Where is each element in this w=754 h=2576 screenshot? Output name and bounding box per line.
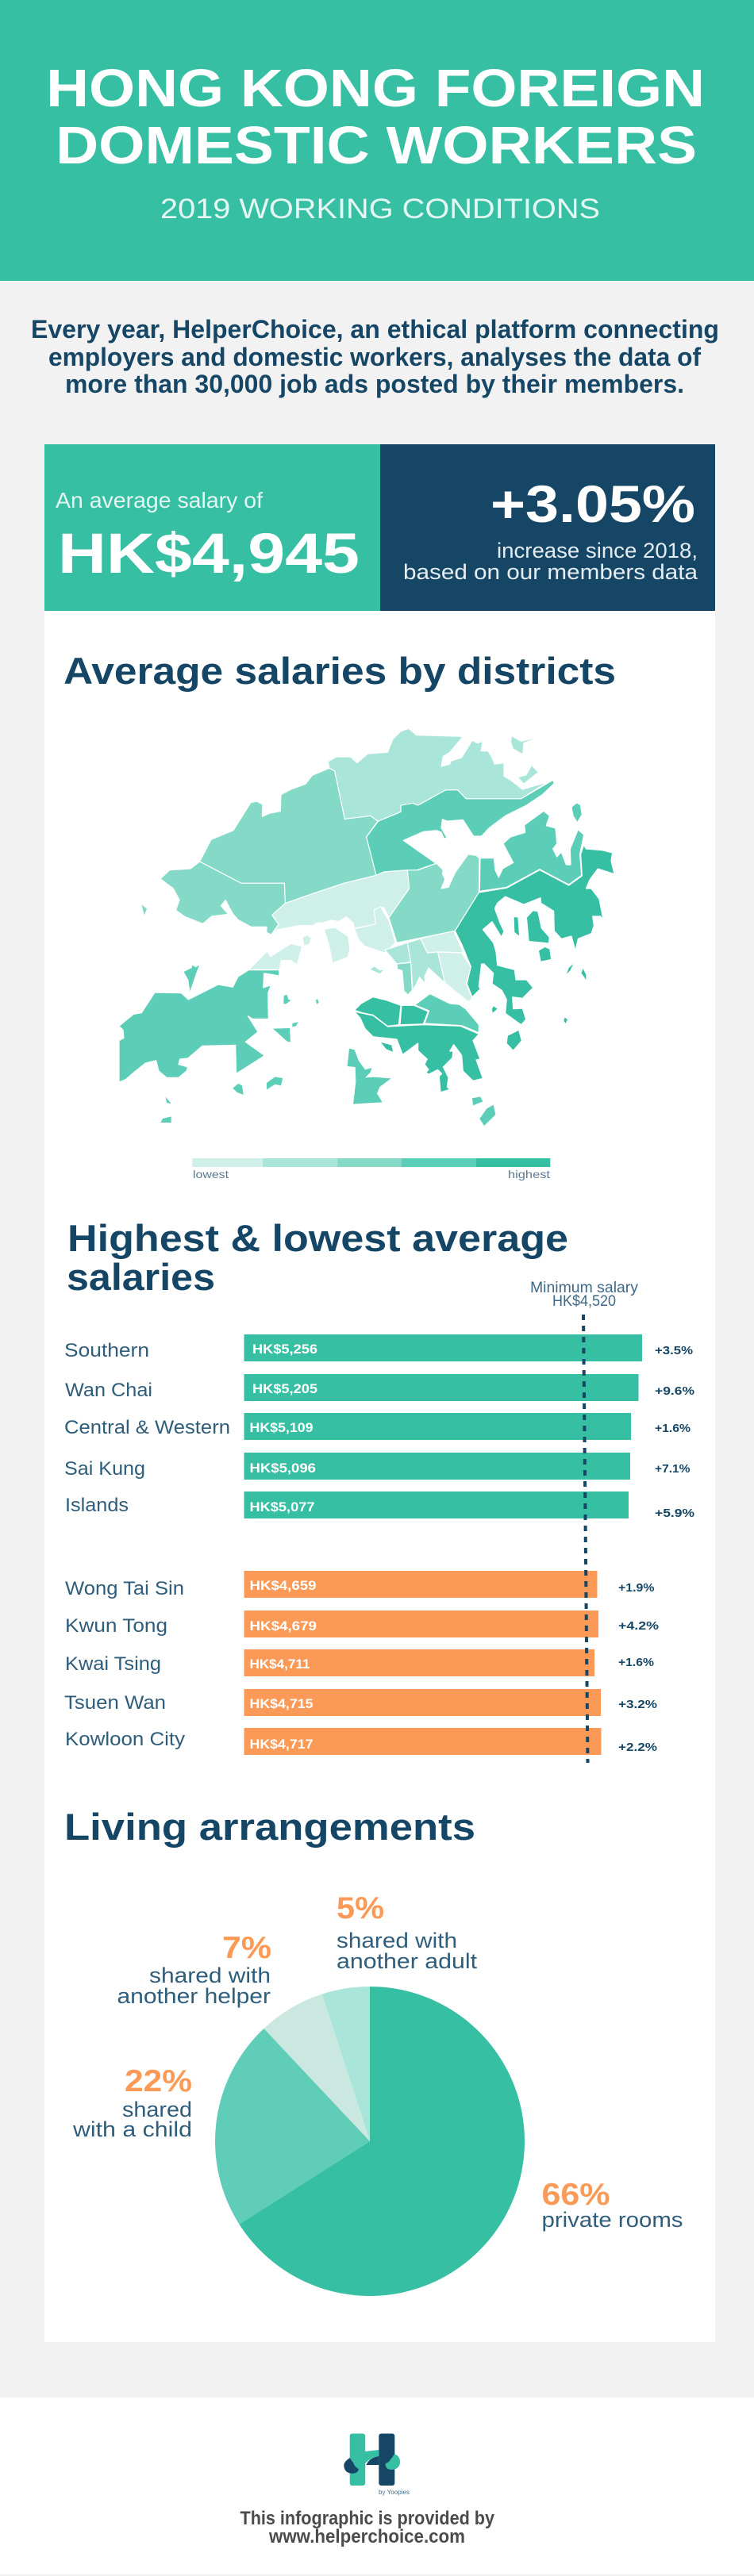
bar: Sai Kung (64, 1453, 691, 1480)
bar: Islands: +5.9% (655, 1507, 694, 1520)
bar: Sai Kung: Sai Kung (64, 1458, 145, 1480)
title: DOMESTIC WORKERS (56, 116, 697, 175)
icon: HelperChoice logo (344, 2434, 400, 2486)
bar: Wong Tai Sin: HK$4,659 (249, 1578, 316, 1593)
footer text: This infographic is provided by (240, 2508, 495, 2529)
heading: districts: Average salaries by districts (63, 650, 616, 692)
minimum salary marker (530, 1280, 638, 1763)
bar: Kwai Tsing: HK$4,711 (249, 1657, 310, 1672)
district: Yuen Long (200, 768, 378, 904)
district: Southern (355, 1012, 483, 1092)
bar: Southern: +3.5% (655, 1344, 693, 1357)
bar: Wong Tai Sin (65, 1571, 654, 1599)
district: North (328, 728, 548, 821)
bar: Southern: Southern (64, 1340, 149, 1361)
label: 7%: 7% (222, 1931, 271, 1965)
label: 22% (72, 2064, 192, 2141)
district: Islands (Lantau) (119, 970, 279, 1082)
bar: Wong Tai Sin: +1.9% (618, 1581, 654, 1595)
bar chart: highest and lowest salaries (64, 1280, 694, 1763)
label: 66% (541, 2178, 683, 2232)
district: Tuen Mun (160, 862, 285, 935)
islet (572, 804, 582, 822)
label: 5%: 5% (337, 1891, 384, 1925)
district: Tsuen Wan (272, 870, 410, 935)
bar: Tsuen Wan (64, 1689, 657, 1716)
label: 22%: shared (122, 2098, 192, 2121)
intro text: more than 30,000 job ads posted by their members. (65, 370, 684, 398)
heading: highest and lowest: salaries (67, 1256, 215, 1298)
bar: Kowloon City: HK$4,717 (249, 1737, 313, 1752)
district: Kowloon City (385, 942, 411, 964)
bar: Wan Chai (65, 1374, 694, 1401)
label: 7%: another helper (117, 1984, 271, 2008)
title (46, 59, 705, 175)
map legend: highest (508, 1168, 550, 1181)
islet (381, 1042, 393, 1052)
label: 22%: with a child (72, 2117, 192, 2141)
slice: private rooms 66% (239, 1987, 525, 2296)
stat: average salary: An average salary of (56, 488, 263, 513)
stat: average salary (44, 444, 380, 611)
label: 5%: shared with (337, 1929, 457, 1952)
bar: Wong Tai Sin: Wong Tai Sin (65, 1578, 184, 1599)
bar: Kowloon City: Kowloon City (65, 1729, 185, 1750)
slice: shared with another helper 7% (264, 1994, 370, 2141)
district: Wan Chai (400, 1005, 428, 1025)
bar: Kwai Tsing: +1.6% (618, 1656, 654, 1669)
bar: Central and Western: Central & Western (64, 1417, 230, 1438)
district: Sai Kung (455, 845, 614, 1025)
minimum salary marker: HK$4,520 (552, 1293, 616, 1310)
bar: Central and Western: HK$5,109 (249, 1420, 313, 1435)
bar: Wan Chai: +9.6% (655, 1384, 694, 1398)
bar: Kwun Tong: Kwun Tong (65, 1615, 167, 1637)
bar: Kwun Tong (65, 1610, 659, 1637)
district: Yau Tsim Mong (397, 962, 412, 995)
intro text: Every year, HelperChoice, an ethical platform connecting (31, 315, 719, 344)
bar: Kwai Tsing (65, 1649, 654, 1676)
bar: Tsuen Wan: Tsuen Wan (64, 1692, 166, 1714)
label: 5%: another adult (337, 1949, 478, 1973)
title: HONG KONG FOREIGN (46, 59, 705, 118)
Kwai Tsing islands (250, 928, 349, 969)
bar: Kwun Tong: +4.2% (618, 1619, 659, 1633)
pie chart: living arrangements (215, 1987, 525, 2296)
bar: Wan Chai: Wan Chai (65, 1380, 152, 1401)
bar: Islands: Islands (65, 1495, 129, 1516)
heading: highest and lowest (67, 1217, 568, 1298)
district: Tai Po (367, 780, 554, 875)
district: Sham Shui Po (354, 907, 395, 953)
bar: Kwai Tsing: Kwai Tsing (65, 1653, 161, 1675)
bar: Southern (64, 1334, 693, 1361)
Sai Kung islets (492, 911, 586, 1050)
bar: Kowloon City: +2.2% (618, 1741, 657, 1754)
map of Hong Kong districts (119, 728, 614, 1126)
district: Central and Western (355, 997, 401, 1026)
stat: salary increase: increase since 2018, (497, 539, 698, 562)
bar: Tsuen Wan: HK$4,715 (249, 1696, 313, 1711)
intro text: employers and domestic workers, analyses the data of (48, 343, 701, 371)
stat: average salary: HK$4,945 (58, 523, 360, 585)
bar: Wan Chai: HK$5,205 (252, 1381, 317, 1396)
footer text: www.helperchoice.com (268, 2526, 465, 2547)
bar: Central and Western (64, 1413, 691, 1440)
district: Eastern (415, 994, 479, 1033)
bar: Kwun Tong: HK$4,679 (249, 1618, 317, 1634)
north islets (511, 736, 537, 783)
bar: Islands: HK$5,077 (249, 1499, 314, 1515)
bar: Sai Kung: HK$5,096 (249, 1461, 316, 1476)
stat: salary increase: based on our members data (403, 560, 698, 584)
map legend (192, 1158, 550, 1181)
bar: Kowloon City (65, 1728, 657, 1755)
heading: highest and lowest: Highest & lowest average (67, 1217, 568, 1259)
district: Wong Tai Sin south (407, 939, 445, 990)
footer text (240, 2508, 495, 2547)
minimum salary marker: Minimum salary (530, 1280, 638, 1296)
label: 7%: shared with (149, 1964, 271, 1987)
district: Kwun Tong (438, 952, 472, 1002)
bar: Islands (65, 1491, 694, 1520)
stat: salary increase (380, 444, 715, 611)
slice: shared with a child 22% (215, 2029, 370, 2225)
slice: shared with another adult 5% (322, 1987, 370, 2141)
footer panel (0, 2397, 754, 2574)
subtitle: 2019 WORKING CONDITIONS (160, 194, 600, 225)
heading: living arrangements: Living arrangements (64, 1806, 475, 1848)
district: Tai Po peninsula (479, 811, 584, 891)
stat: salary increase: +3.05% (490, 474, 695, 533)
bar: Sai Kung: +7.1% (655, 1462, 691, 1476)
label: 66%: private rooms (541, 2208, 683, 2232)
bar: Tsuen Wan: +3.2% (618, 1698, 657, 1711)
white content panel (44, 611, 715, 2342)
Islands islets (160, 966, 495, 1126)
label: 66%: 66% (541, 2178, 610, 2212)
label: 22%: 22% (125, 2064, 192, 2098)
intro text (31, 315, 719, 398)
bar: Central and Western: +1.6% (655, 1422, 691, 1435)
district: Wong Tai Sin (421, 931, 464, 953)
district: Sha Tin (389, 854, 479, 942)
header band (0, 0, 754, 281)
label: 5% (337, 1891, 478, 1973)
map legend: lowest (193, 1168, 229, 1181)
islet (371, 966, 383, 973)
label: 7% (117, 1931, 271, 2008)
logo tagline: by Yoopies (379, 2489, 410, 2496)
bar: Southern: HK$5,256 (252, 1342, 317, 1357)
islet (141, 904, 147, 915)
